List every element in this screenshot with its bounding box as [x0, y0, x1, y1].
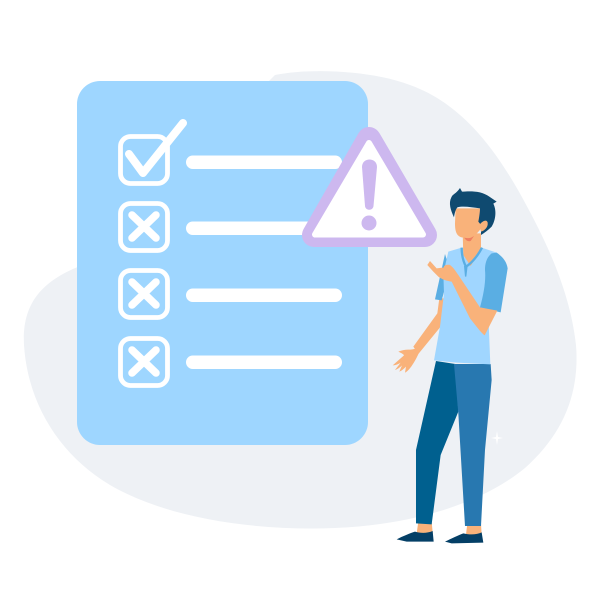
- checklist item 3: crossed box: [120, 270, 342, 318]
- back sleeve: [435, 254, 450, 300]
- torso, arms and head: [393, 188, 508, 373]
- person: [393, 188, 508, 543]
- sparkle: [491, 431, 503, 445]
- ear: [479, 221, 488, 232]
- right sleeve: [480, 253, 508, 312]
- left hand: [393, 348, 419, 373]
- neck: [463, 233, 481, 266]
- legs and shoes: [397, 361, 492, 543]
- panel: checklist card: [77, 81, 368, 445]
- checklist item 4: crossed box: [120, 338, 342, 386]
- checklist item 1: checked box: [120, 123, 342, 184]
- checklist item 2: crossed box: [120, 204, 342, 250]
- icon: warning triangle: [314, 139, 425, 235]
- left arm: [413, 298, 447, 354]
- right arm and hand: [427, 261, 497, 335]
- hair: [450, 188, 497, 235]
- background blob: [24, 71, 577, 528]
- shirt: [434, 248, 497, 364]
- face: [455, 208, 481, 238]
